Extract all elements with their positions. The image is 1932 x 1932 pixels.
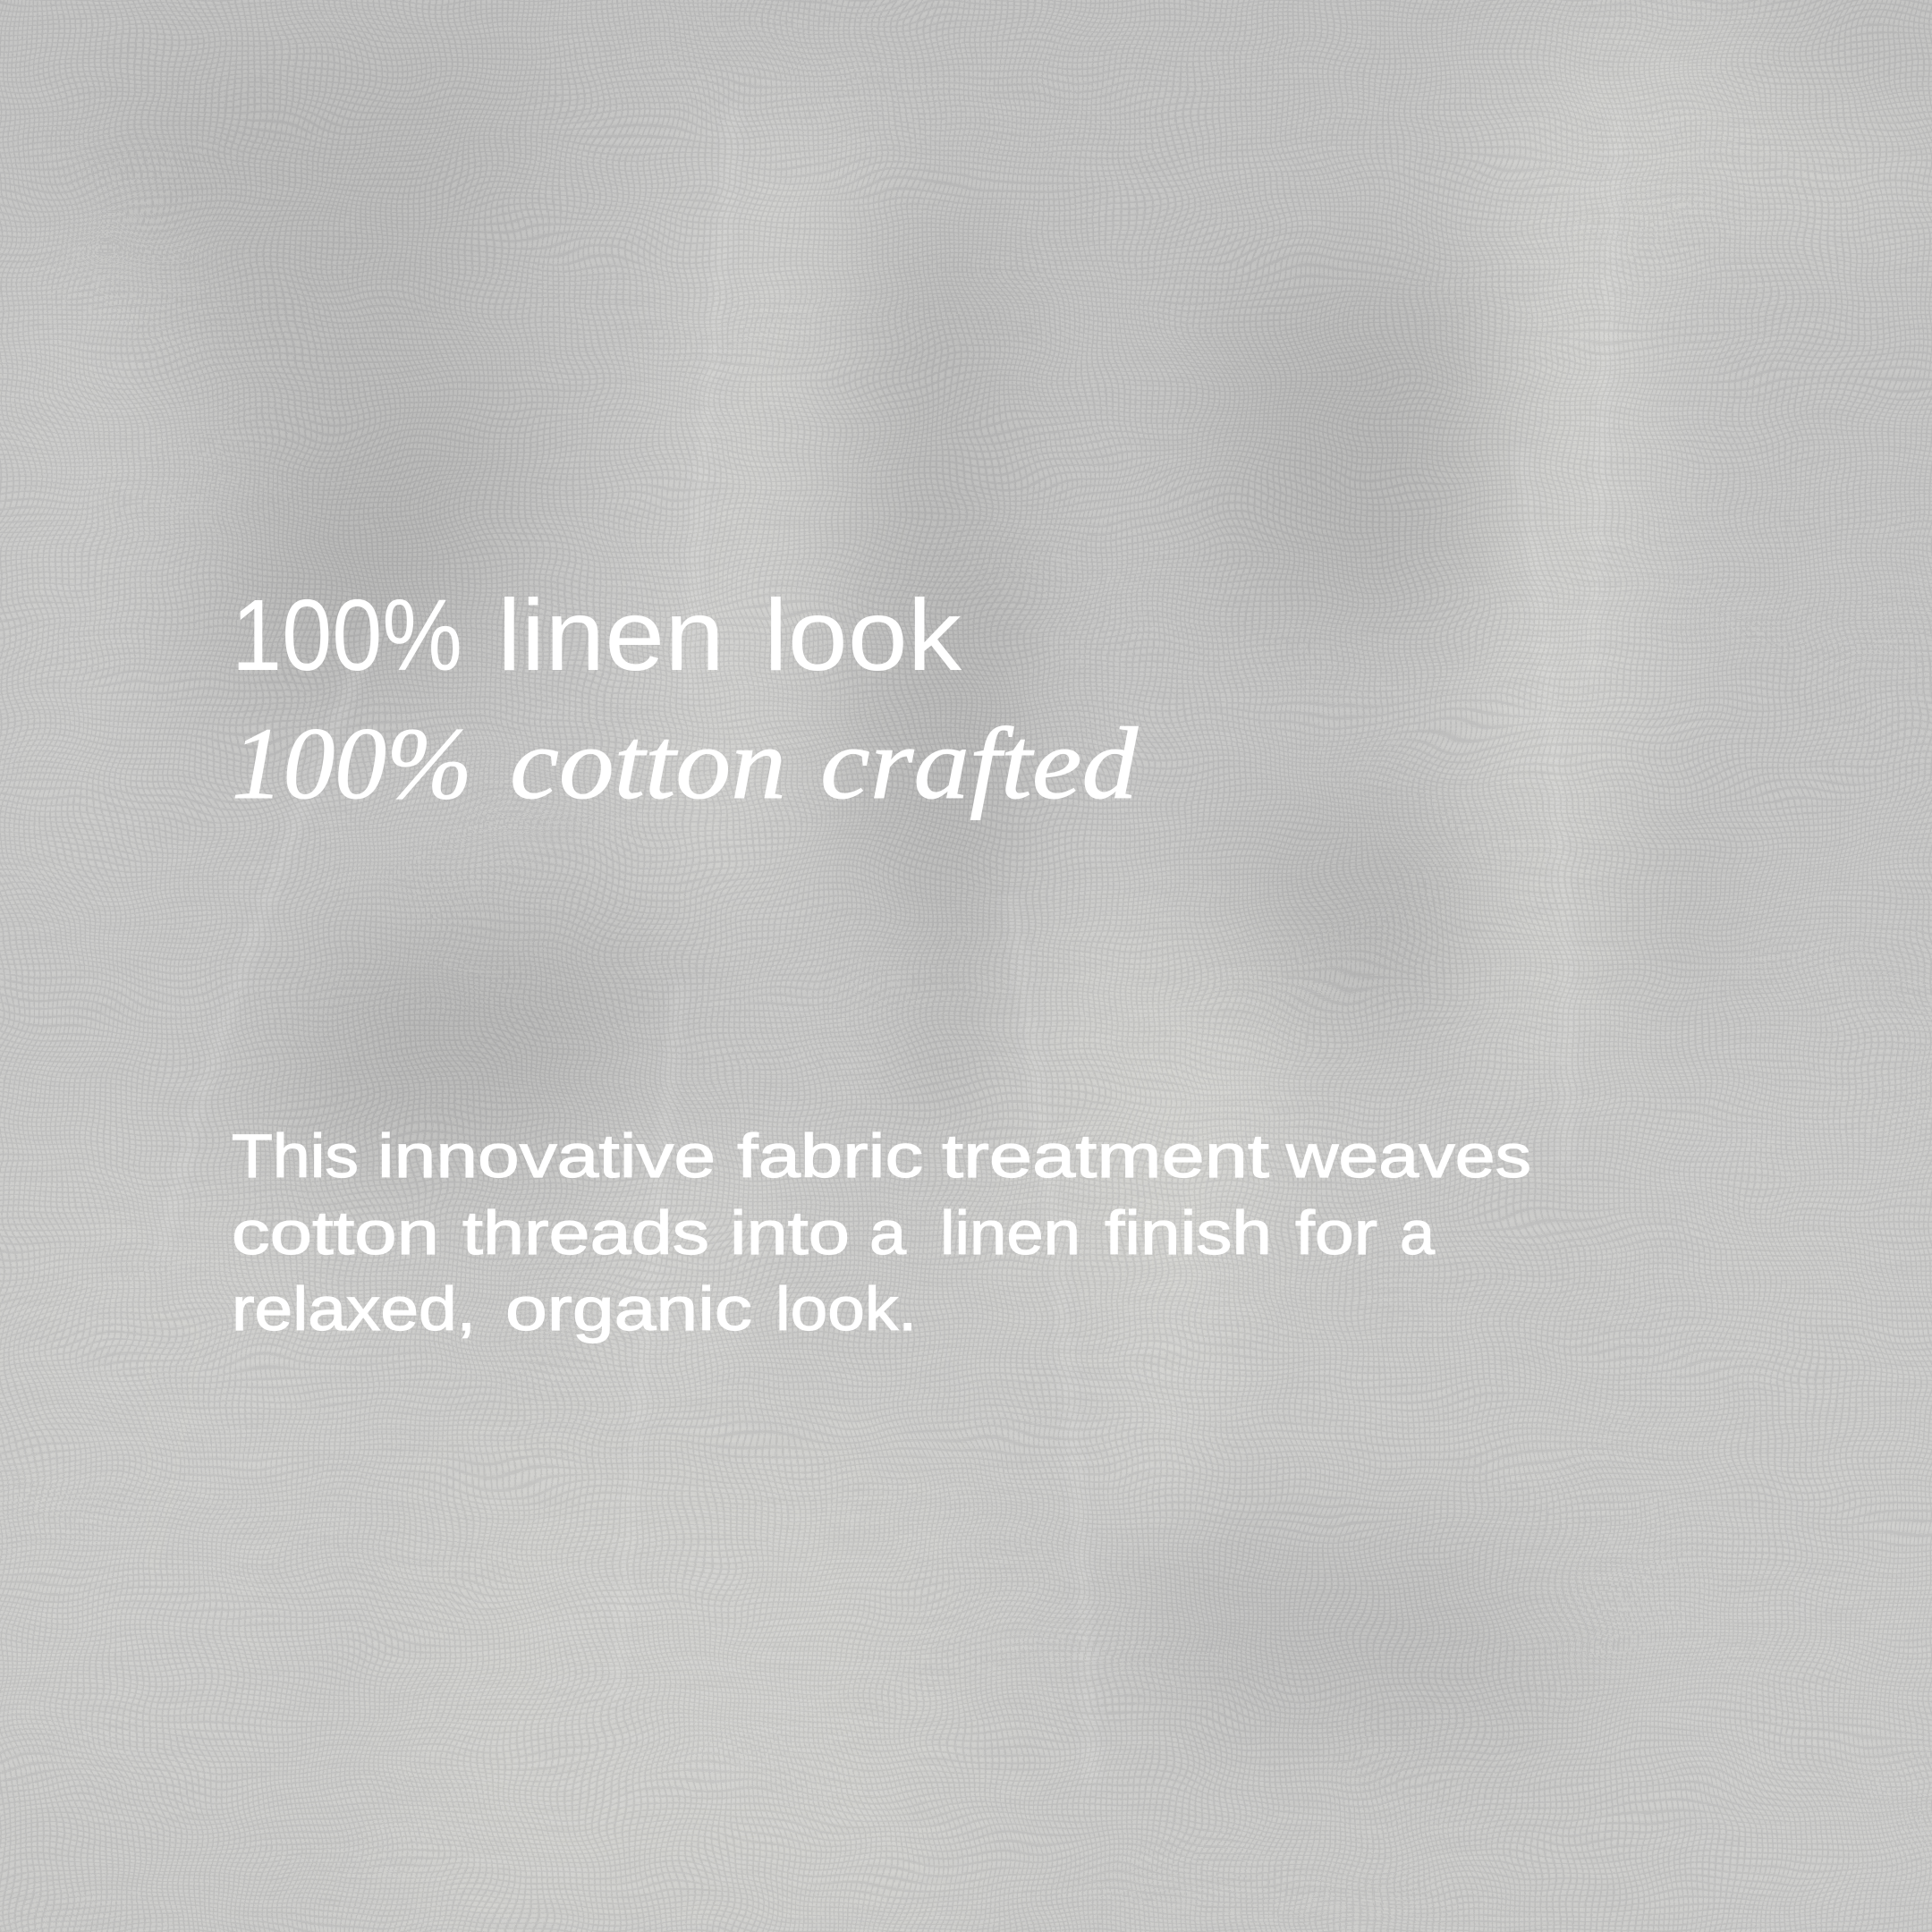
description paragraph: relaxed, — [232, 1275, 476, 1343]
heading line 2 italic — [232, 707, 1139, 820]
description paragraph: cotton — [232, 1199, 439, 1267]
description paragraph: innovative — [377, 1122, 716, 1191]
slub threads — [161, 107, 1619, 1789]
description paragraph: finish — [1105, 1199, 1272, 1267]
heading line 2 italic: cotton — [510, 707, 786, 820]
heading line 1 — [232, 579, 962, 691]
description paragraph: look. — [775, 1275, 917, 1343]
description paragraph: treatment — [942, 1122, 1269, 1191]
description paragraph: linen — [940, 1199, 1080, 1267]
description paragraph: This — [232, 1122, 359, 1191]
description paragraph: into — [730, 1199, 850, 1267]
description paragraph — [232, 1122, 1531, 1343]
description paragraph: weaves — [1285, 1122, 1531, 1191]
heading line 1: 100% — [232, 579, 462, 691]
description paragraph: a — [1400, 1199, 1436, 1267]
description paragraph: for — [1295, 1199, 1377, 1267]
description paragraph: organic — [505, 1275, 752, 1343]
heading line 1: look — [764, 579, 962, 691]
heading line 2 italic: crafted — [820, 707, 1139, 820]
heading line 2 italic: 100% — [232, 707, 472, 820]
description paragraph: a — [869, 1199, 907, 1267]
description paragraph: fabric — [737, 1122, 923, 1191]
description paragraph: threads — [462, 1199, 709, 1267]
heading line 1: linen — [497, 579, 724, 691]
